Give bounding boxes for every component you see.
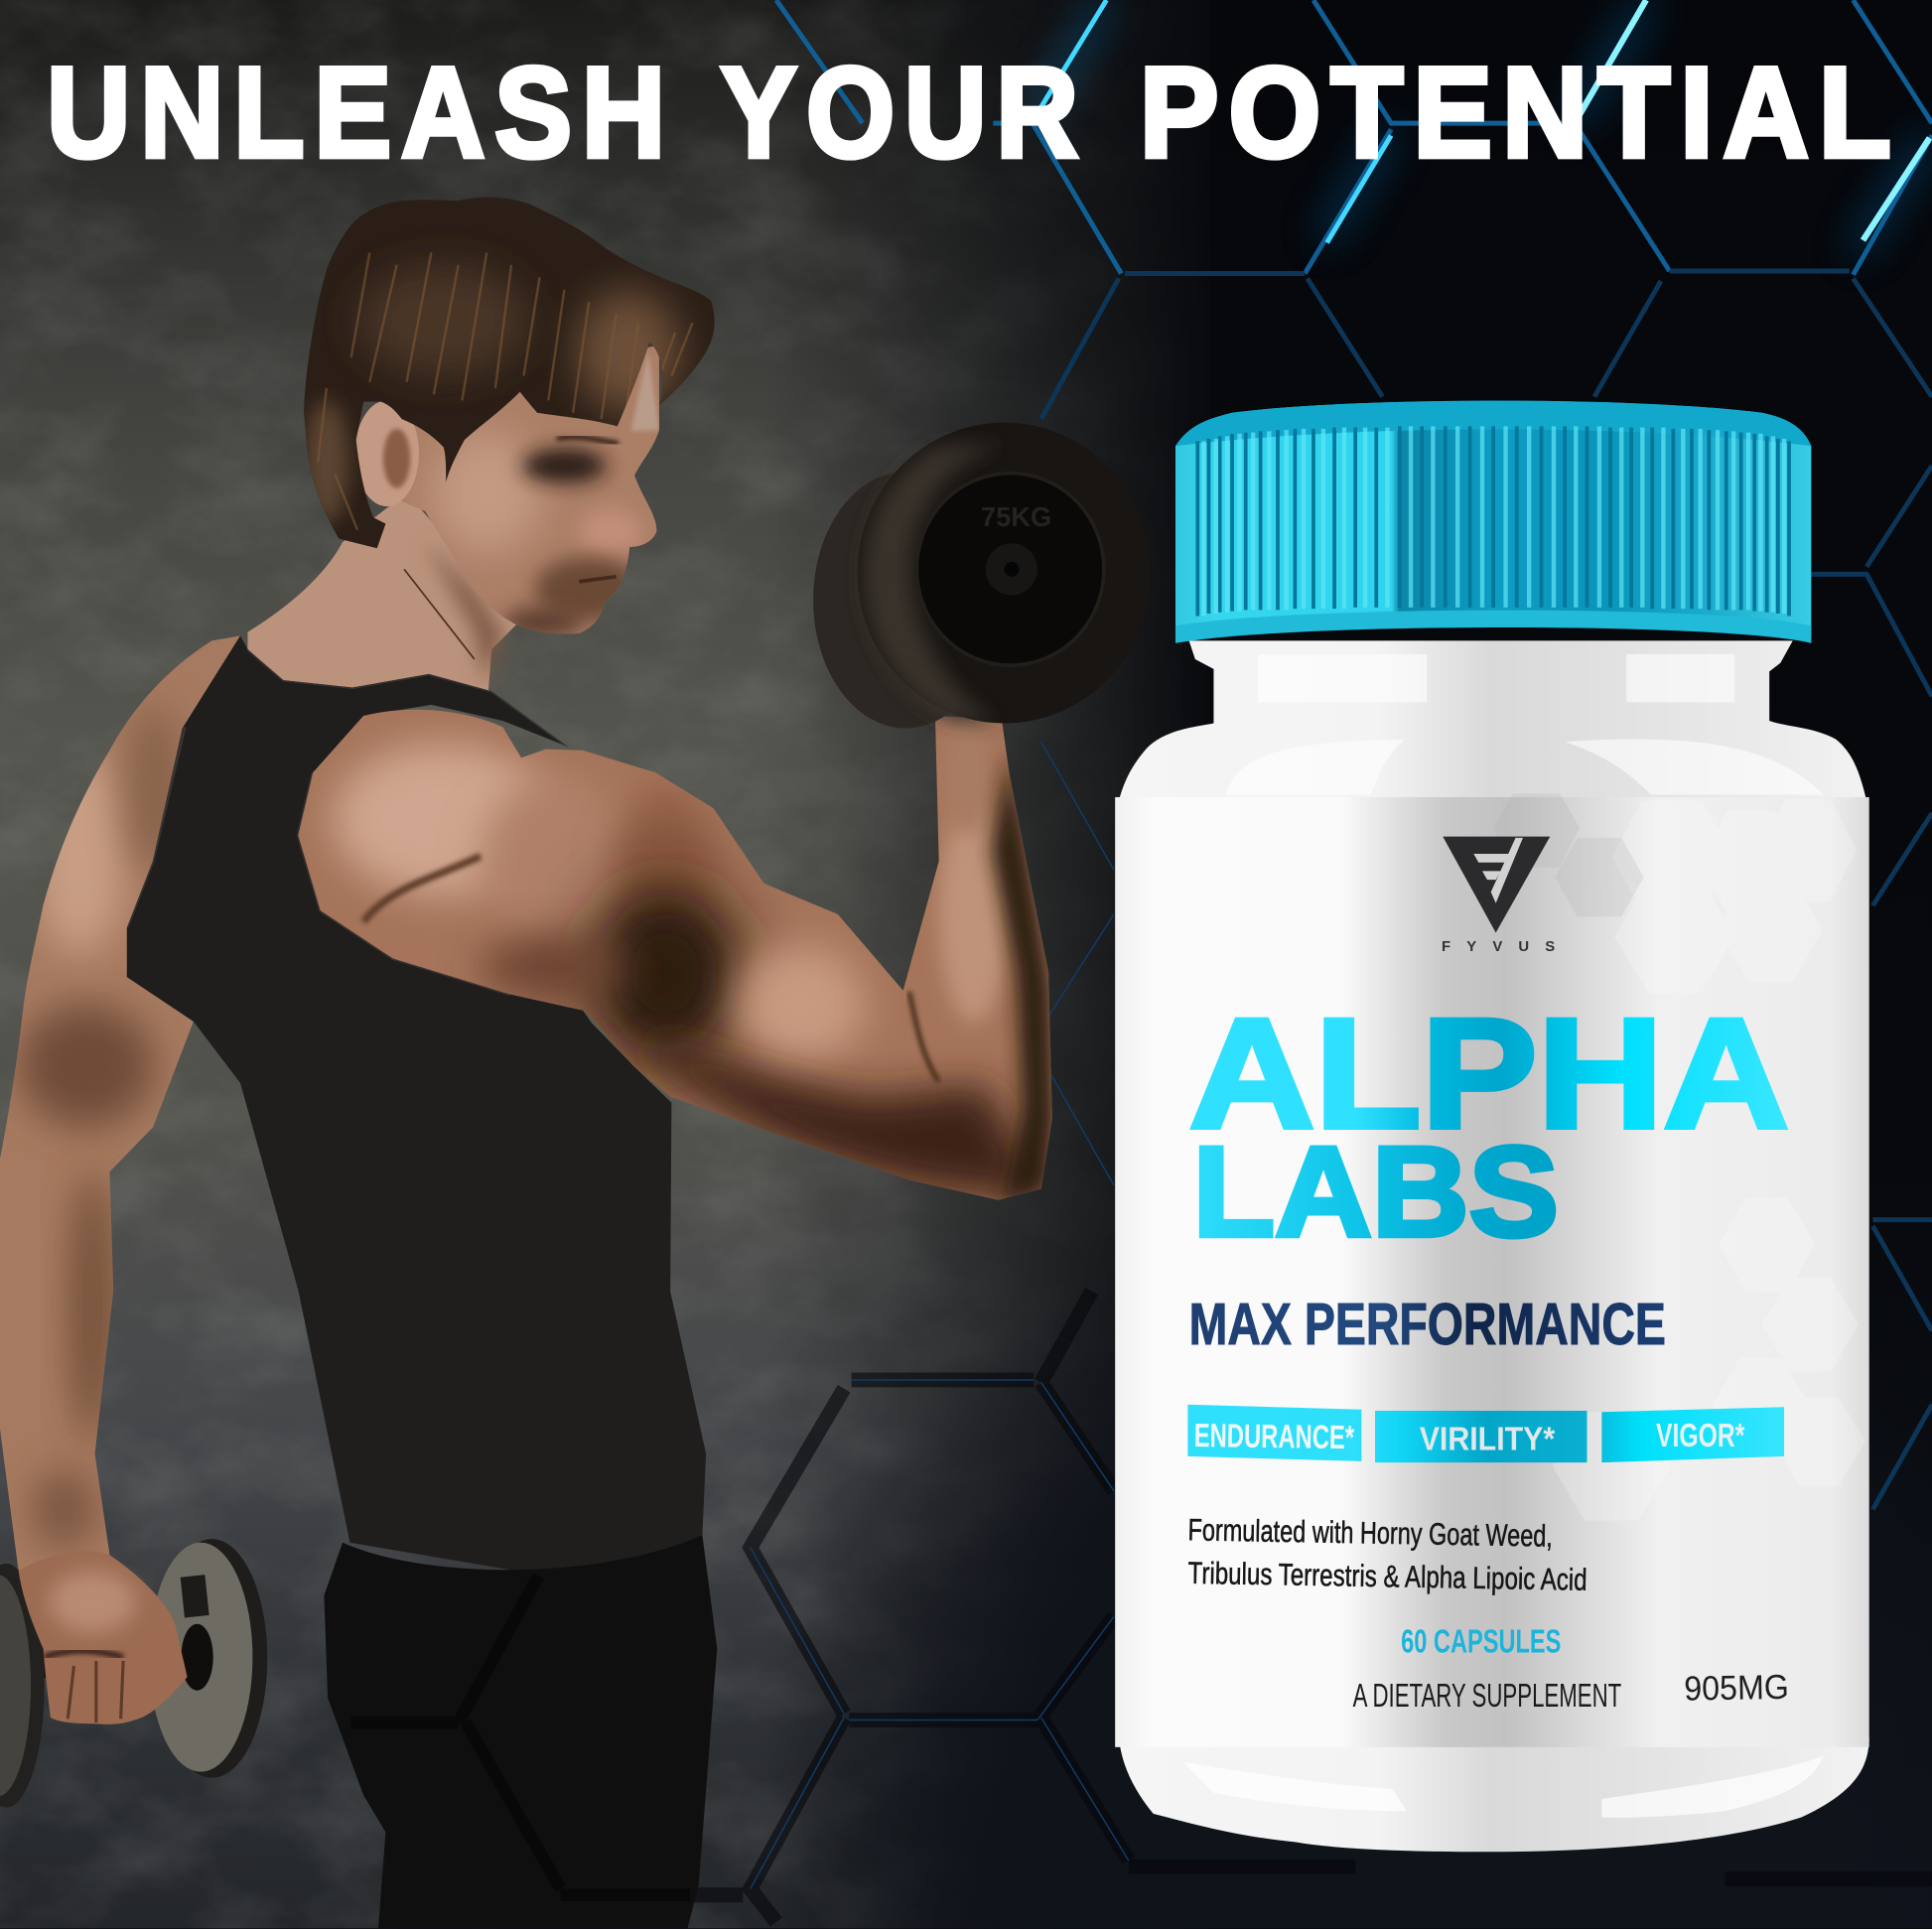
head xyxy=(304,198,715,640)
benefit badges xyxy=(1187,1405,1784,1462)
title xyxy=(47,42,1901,185)
ingredients text xyxy=(1187,1512,1587,1597)
upper dumbbell xyxy=(813,423,1151,728)
supplement bottle xyxy=(1115,401,1869,1852)
man figure xyxy=(0,198,1151,1928)
capsule count: 60 CAPSULES xyxy=(1401,1623,1561,1660)
dosage: 905MG xyxy=(1684,1669,1789,1709)
neck highlights xyxy=(1226,654,1824,794)
ear xyxy=(354,400,419,506)
product name: ALPHA xyxy=(1189,987,1789,1162)
badge: virility xyxy=(1375,1411,1587,1462)
label hexagon pattern xyxy=(1493,793,1865,1520)
lower hand xyxy=(19,1551,188,1724)
dietary supplement note: A DIETARY SUPPLEMENT xyxy=(1353,1678,1621,1715)
base highlights xyxy=(1182,1756,1824,1818)
hexagon grid xyxy=(542,0,1932,1922)
label panel xyxy=(1115,797,1869,1747)
cap ridges xyxy=(1197,426,1789,617)
brand name: FYVUS xyxy=(1442,939,1555,955)
hair xyxy=(304,198,715,548)
tagline: MAX PERFORMANCE xyxy=(1189,1291,1666,1357)
title: YOUR xyxy=(721,42,1088,185)
brand logo xyxy=(1442,837,1555,955)
back arm xyxy=(0,635,240,1578)
neck and upper back xyxy=(247,492,516,696)
title: UNLEASH xyxy=(47,42,675,185)
badge: endurance: ENDURANCE* xyxy=(1193,1418,1354,1456)
plate weight stamp: 75KG xyxy=(981,501,1051,532)
tank top xyxy=(127,635,706,1576)
ingredients text: Tribulus Terrestris & Alpha Lipoic Acid xyxy=(1187,1556,1587,1597)
badge: endurance xyxy=(1187,1405,1361,1461)
bottle neck and shoulder xyxy=(1119,640,1866,801)
trousers xyxy=(324,1535,717,1928)
bottle base xyxy=(1119,1737,1869,1852)
lower dumbbell xyxy=(0,1539,267,1808)
ingredients text: Formulated with Horny Goat Weed, xyxy=(1187,1512,1553,1554)
product sub-name: LABS xyxy=(1192,1121,1559,1264)
badge: virility: VIRILITY* xyxy=(1420,1422,1555,1458)
badge: vigor: VIGOR* xyxy=(1656,1418,1744,1454)
raised arm xyxy=(298,710,1053,1201)
cap xyxy=(1175,401,1811,643)
badge: vigor xyxy=(1601,1407,1784,1462)
